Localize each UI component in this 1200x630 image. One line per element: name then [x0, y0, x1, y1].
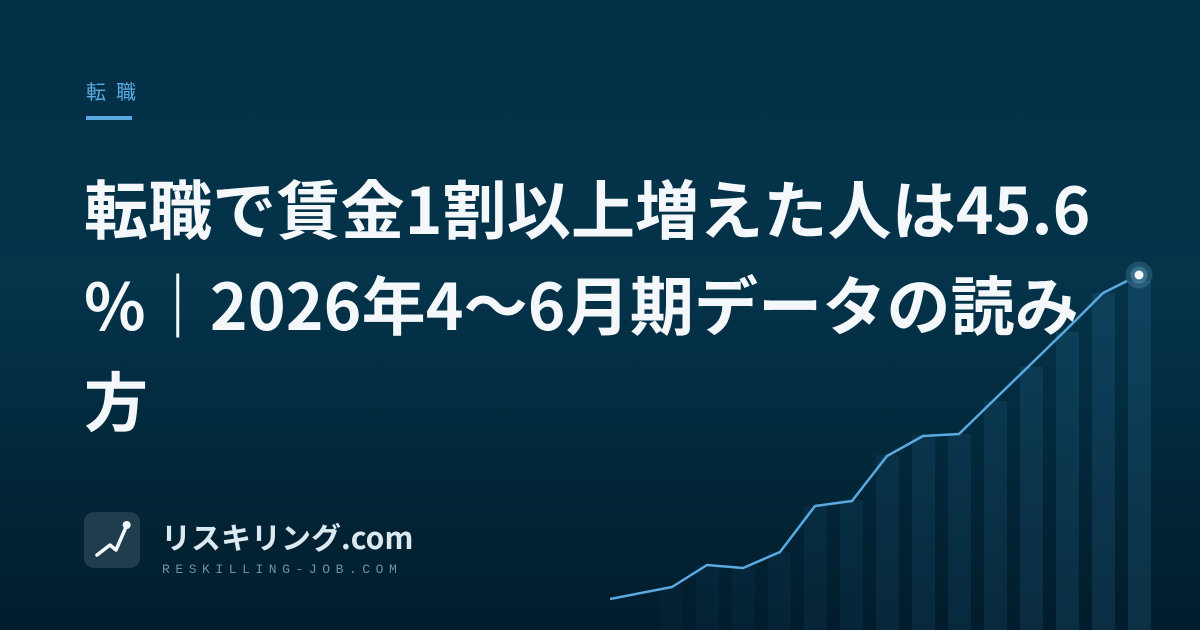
title [84, 161, 1091, 445]
brand url: RESKILLING-JOB.COM [162, 562, 402, 577]
title: 転職で賃金1割以上増えた人は45.6 [84, 161, 1091, 253]
trend line [610, 281, 1127, 599]
end point marker [1126, 262, 1152, 288]
category label: 転職 [86, 76, 146, 105]
brand name: リスキリング.com [161, 514, 413, 558]
icon: logo chart [84, 512, 140, 568]
title: %｜2026年4〜6月期データの読み [84, 257, 1079, 349]
category underline [86, 116, 132, 120]
bars [660, 281, 1151, 630]
title: 方 [84, 353, 148, 445]
logo [84, 512, 140, 568]
